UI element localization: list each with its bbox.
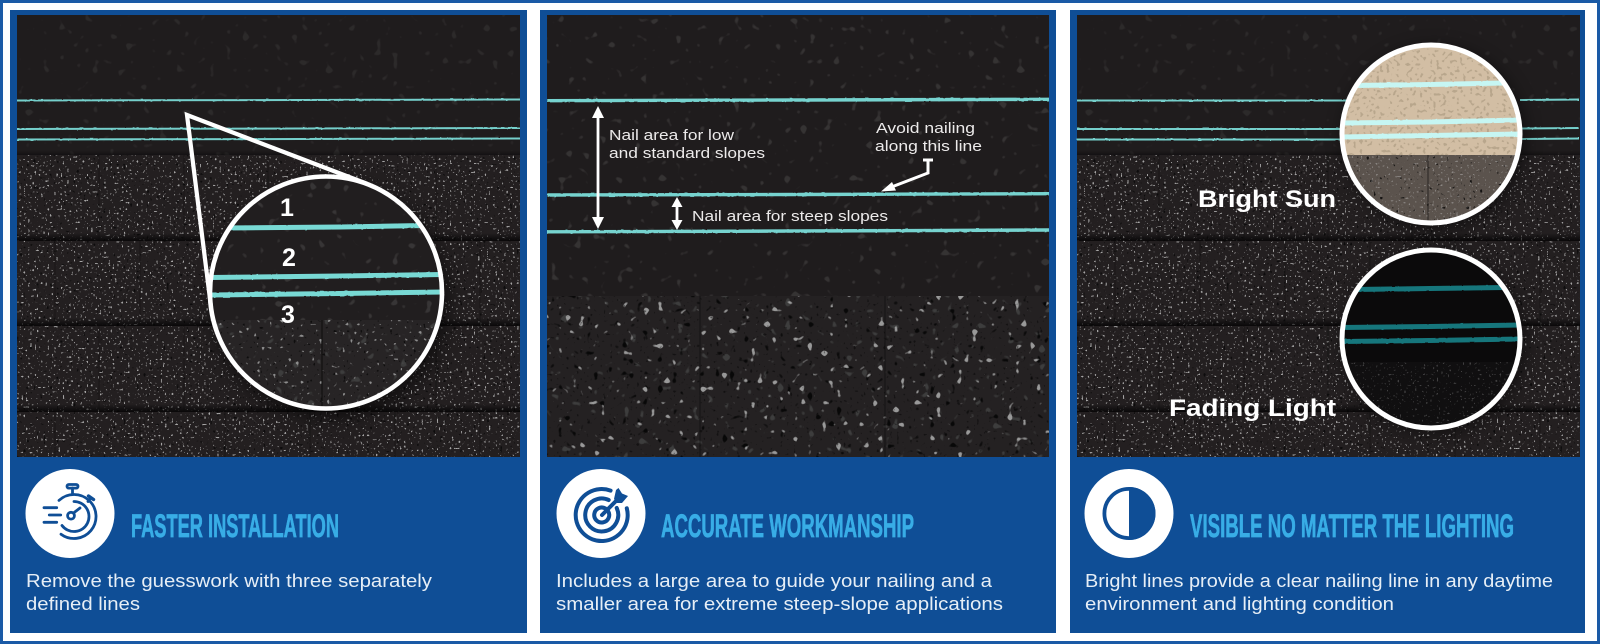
shingle photo with three lines <box>1077 15 1580 457</box>
panel: visible no matter the lighting <box>1070 10 1585 633</box>
icon: stopwatch <box>26 469 114 558</box>
line numbers: 3 <box>281 301 295 329</box>
arrow: avoid nailing pointer <box>881 160 933 192</box>
body text: environment and lighting condition <box>1085 594 1394 614</box>
body text <box>1085 571 1553 614</box>
panel: faster installation <box>10 10 527 633</box>
arrow: low and standard slopes area <box>592 106 604 229</box>
shingle photo with three lines <box>17 15 520 457</box>
label: low and standard slopes: and standard slopes <box>609 145 765 162</box>
icon: half-filled circle <box>1084 469 1174 558</box>
body text: Includes a large area to guide your nailing and a <box>556 571 993 591</box>
circle: bright sun view <box>1338 40 1524 228</box>
heading: FASTER INSTALLATION <box>131 508 339 544</box>
body text <box>26 571 432 614</box>
label: avoid nailing <box>875 120 982 155</box>
label: fading light: Fading Light <box>1169 395 1336 422</box>
label: low and standard slopes <box>609 127 765 162</box>
heading: ACCURATE WORKMANSHIP <box>661 508 914 544</box>
label: bright sun: Bright Sun <box>1198 186 1336 213</box>
label: avoid nailing: along this line <box>875 138 982 155</box>
body text: smaller area for extreme steep-slope applications <box>556 594 1003 614</box>
body text: Bright lines provide a clear nailing line in any daytime <box>1085 571 1553 591</box>
zoomed shingle photo <box>547 15 1049 457</box>
body text: Remove the guesswork with three separately <box>26 571 432 591</box>
magnifier callout <box>187 115 450 418</box>
line numbers <box>280 194 296 329</box>
label: steep slopes: Nail area for steep slopes <box>692 208 888 225</box>
line numbers: 2 <box>282 244 296 272</box>
arrow: steep slopes area <box>672 197 682 230</box>
three nailing lines <box>547 99 1049 232</box>
icon: target <box>556 469 646 558</box>
label: low and standard slopes: Nail area for low <box>609 127 734 144</box>
circle: fading light view <box>1338 245 1524 435</box>
body text: defined lines <box>26 594 140 614</box>
body text <box>556 571 1003 614</box>
label: avoid nailing: Avoid nailing <box>876 120 975 137</box>
panel: accurate workmanship <box>540 10 1056 633</box>
line numbers: 1 <box>280 194 294 222</box>
